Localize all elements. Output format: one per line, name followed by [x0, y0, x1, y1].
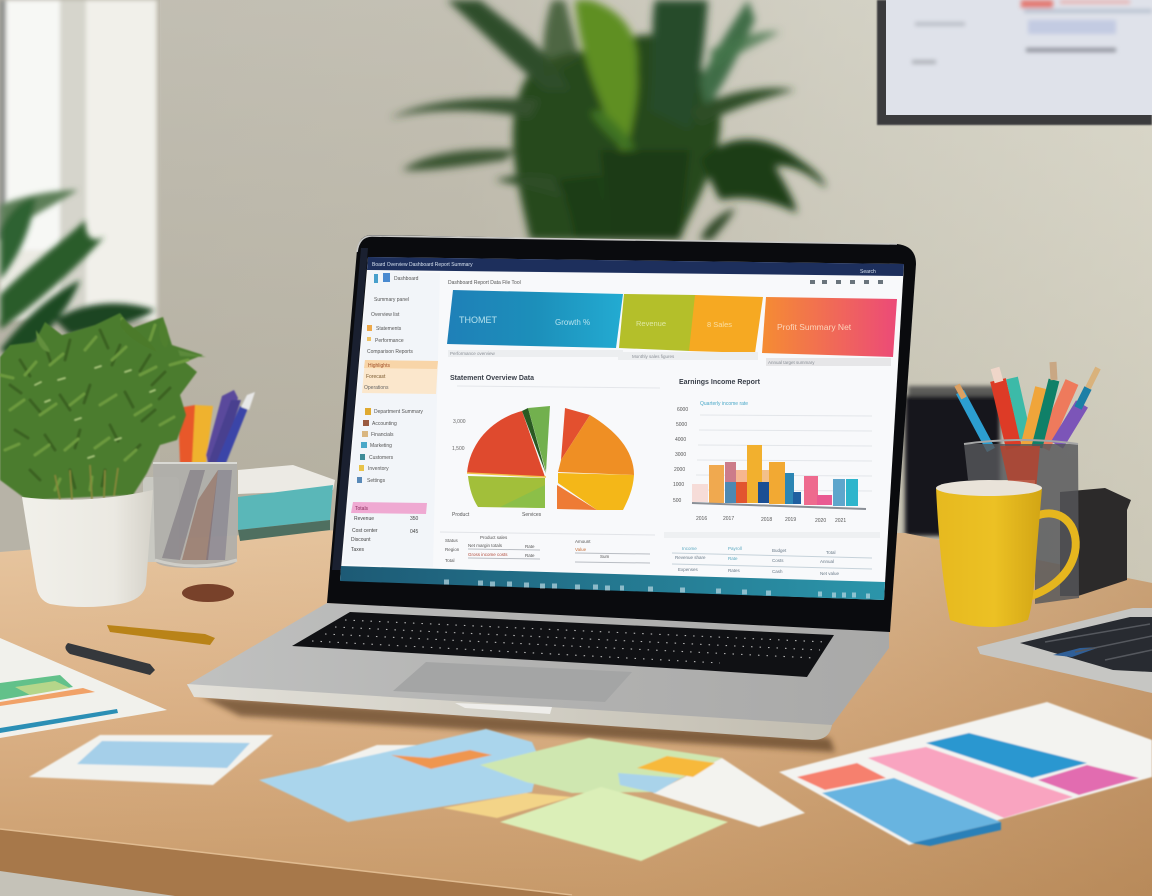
banner green and orange: Revenue — [636, 319, 666, 328]
banner blue: THOMET — [459, 315, 497, 325]
bar chart panel: 5000 — [676, 422, 687, 428]
trackpad — [393, 662, 632, 702]
top title bar: Search — [860, 269, 876, 275]
bar chart panel: 6000 — [677, 407, 688, 413]
sidebar: Forecast — [366, 374, 386, 380]
sidebar: Overview list — [371, 312, 400, 318]
green note — [480, 738, 722, 793]
bottom table left: Product sales — [480, 535, 508, 540]
bottom table left: Net margin totals — [468, 543, 503, 548]
laptop — [187, 235, 916, 740]
bottom table left: Rate — [525, 544, 535, 549]
plant foliage — [0, 313, 206, 500]
light blue patch — [618, 773, 681, 793]
laptop shadow — [200, 696, 835, 752]
sidebar: Operations — [364, 385, 389, 391]
top title bar: Board Overview Dashboard Report Summary — [372, 262, 473, 268]
banner captions: Monthly sales figures — [632, 354, 675, 359]
notebook on desk left — [238, 465, 335, 541]
pie chart panel: Services — [522, 512, 542, 518]
banner green and orange: 8 Sales — [707, 320, 732, 329]
bar chart panel: 1000 — [673, 482, 684, 488]
bar chart panel: 2018 — [761, 517, 772, 523]
bottom table right: Costs — [772, 558, 784, 563]
bottom table right: Cash — [772, 569, 783, 574]
sidebar: 045 — [410, 529, 419, 535]
bar chart panel: 2016 — [696, 516, 707, 522]
bottom table right: Total — [826, 550, 836, 555]
bottom table right: Revenue share — [675, 555, 706, 560]
window and curtain — [0, 0, 157, 320]
bar chart panel: 4000 — [675, 437, 686, 443]
toolbar: Dashboard Report Data File Tool — [448, 280, 521, 286]
blue card paper — [29, 735, 273, 785]
bottom table right: Annual — [820, 559, 834, 564]
sidebar: Discount — [351, 537, 371, 543]
sticky notes centre — [259, 729, 805, 861]
sidebar: Accounting — [372, 421, 397, 427]
pie chart panel: Product — [452, 512, 470, 518]
wall picture frame — [877, 0, 1152, 125]
lid — [327, 235, 916, 632]
banner blue — [447, 290, 623, 348]
white sheet right of notes — [653, 758, 805, 827]
taskbar — [340, 566, 885, 600]
sidebar: Comparison Reports — [367, 349, 413, 355]
bar chart panel: 2000 — [674, 467, 685, 473]
bezel left — [332, 248, 368, 570]
keyboard — [292, 612, 834, 677]
bottom table right: Rates — [728, 568, 741, 573]
bottom table left — [440, 532, 655, 563]
colored papers right — [779, 702, 1152, 846]
yellow note — [443, 793, 572, 818]
gold pen — [107, 625, 215, 645]
back left green leaves — [0, 190, 155, 360]
sidebar: Marketing — [370, 443, 392, 449]
bottom table left: Status — [445, 538, 459, 543]
sidebar: Performance — [375, 338, 404, 344]
orange square note — [637, 756, 715, 777]
bottom table left: Region — [445, 547, 460, 552]
bottom table right: Expenses — [678, 567, 699, 572]
dark cabinet behind mug — [905, 386, 1000, 536]
bar chart panel: 500 — [673, 498, 682, 504]
pie chart panel: 3,000 — [453, 419, 466, 425]
pot — [22, 490, 153, 607]
bottom table right: Budget — [772, 548, 787, 553]
bottom table left: Gross income costs — [468, 552, 508, 557]
sidebar: Financials — [371, 432, 394, 438]
banner pink: Profit Summary Net — [777, 322, 852, 332]
bar chart panel: 2020 — [815, 518, 826, 524]
desk front edge — [0, 829, 572, 896]
black marker — [65, 643, 155, 675]
bottom table left: Value — [575, 547, 587, 552]
calculator right — [977, 608, 1152, 693]
background palm plant — [390, 0, 826, 240]
sidebar: Dashboard — [394, 276, 419, 282]
sidebar: Totals — [355, 506, 369, 512]
bottom table left: Amount — [575, 539, 591, 544]
sidebar: Customers — [369, 455, 394, 461]
bottom table left: Sum — [600, 554, 610, 559]
bottom table right: Net value — [820, 571, 840, 576]
bottom table left: Total — [445, 558, 455, 563]
sidebar — [343, 271, 440, 567]
sidebar: Settings — [367, 478, 386, 484]
coffee mug — [936, 480, 1076, 627]
sidebar: Taxes — [351, 547, 365, 553]
pencil cup left — [143, 390, 255, 568]
white paper under blue note — [319, 745, 420, 770]
pencil cup right — [957, 362, 1098, 604]
bar chart panel: 2021 — [835, 518, 846, 524]
sidebar: Cost center — [352, 528, 378, 534]
bar chart panel: 2017 — [723, 516, 734, 522]
sidebar: Department Summary — [374, 409, 423, 415]
top title bar — [367, 257, 904, 276]
banner pink — [762, 297, 897, 357]
potted plant — [0, 313, 206, 607]
sidebar: Inventory — [368, 466, 389, 472]
bottom table right: Payroll — [728, 546, 742, 551]
pie chart panel: 1,500 — [452, 446, 465, 452]
banner green and orange — [619, 294, 763, 353]
desk surface — [0, 530, 1152, 896]
bar chart panel: Earnings Income Report — [679, 379, 761, 386]
bottom table right: Rate — [728, 556, 738, 561]
bar chart panel: 3000 — [675, 452, 686, 458]
screen — [340, 257, 904, 600]
sidebar: Summary panel — [374, 297, 409, 303]
pale green note front — [500, 787, 728, 861]
background wall — [0, 0, 1152, 600]
bottom table left: Rate — [525, 553, 535, 558]
bottom table right — [664, 532, 880, 576]
banner captions: Annual target summary — [768, 360, 815, 365]
sidebar: 350 — [410, 516, 419, 522]
blue note left — [259, 729, 540, 822]
sidebar: Statements — [376, 326, 402, 332]
dark box right — [1060, 488, 1131, 596]
bar chart panel: 2019 — [785, 517, 796, 523]
small brown stone — [182, 584, 234, 602]
orange note — [391, 750, 492, 769]
laptop base — [187, 603, 889, 739]
desk shading — [0, 530, 1152, 896]
banner captions: Performance overview — [450, 351, 496, 356]
sidebar: Highlights — [368, 363, 390, 369]
banner captions — [448, 350, 891, 366]
printed chart paper left — [0, 638, 167, 738]
pie chart panel — [450, 375, 660, 518]
pie chart panel: Statement Overview Data — [450, 375, 534, 382]
bottom table right: Income — [682, 546, 697, 551]
sidebar: Revenue — [354, 516, 374, 522]
bar chart panel — [673, 379, 872, 524]
banner blue: Growth % — [555, 318, 590, 327]
hinge notch — [455, 703, 552, 714]
bar chart panel: Quarterly income rate — [700, 401, 748, 407]
